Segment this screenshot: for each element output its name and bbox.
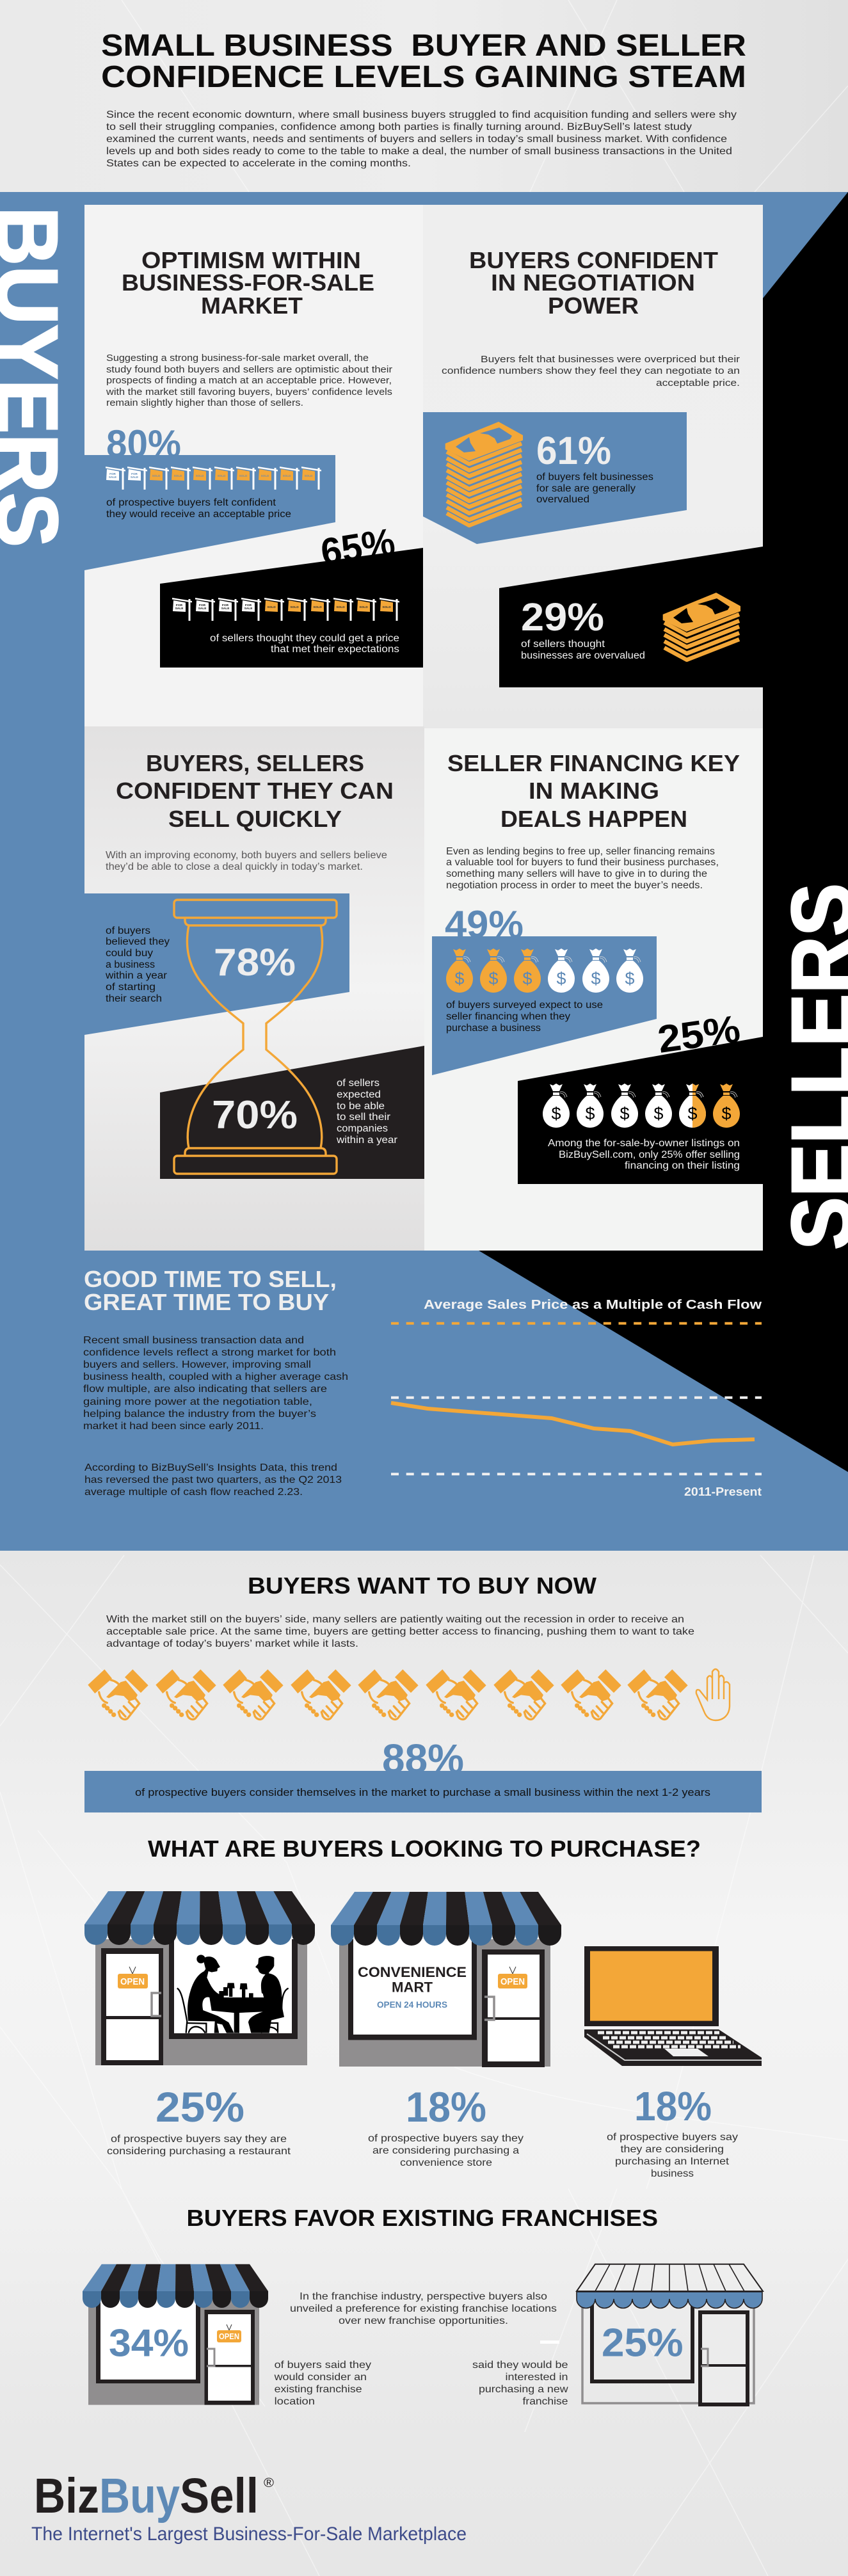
body text: prospects of finding a match at an acceptable price. However, [106,375,392,386]
icon: existing franchise store: OPEN [219,2332,239,2341]
logo: BizBuySell [34,2468,274,2524]
sellers text [336,1078,397,1146]
icon row: sold signs: SALE [175,607,184,611]
middle text: over new franchise opportunities. [339,2316,508,2326]
icon row: sold signs: SALE [221,607,230,611]
icon row: for sale signs [106,467,321,490]
body text: with the market still favoring buyers, buyers’ confidence levels [106,387,392,397]
blue callout [423,412,687,544]
body text: remain slightly higher than those of sellers. [106,397,303,408]
intro text [106,109,737,169]
body text [83,1335,348,1432]
new franchise text: purchasing a new [479,2384,568,2395]
icon row: handshakes [88,1669,688,1720]
black callout [160,548,423,668]
buyers text: of starting [106,982,156,993]
black callout text: BizBuySell.com, only 25% offer selling [559,1149,740,1160]
heading: WHAT ARE BUYERS LOOKING TO PURCHASE? [148,1836,701,1862]
callout text: of prospective buyers felt confident [106,497,276,508]
body text: buyers and sellers. However, improving small [83,1359,311,1370]
icon: money stack [445,422,523,525]
icon row: money bags: $ [522,969,532,988]
icon row: for sale signs: FOR [109,472,116,476]
body text: acceptable price. [656,378,740,388]
stat: internet business: they are considering [621,2144,724,2155]
black callout [518,1037,763,1184]
black callout text: of sellers thought they could get a price [210,633,399,644]
sellers text: to sell their [337,1112,390,1123]
heading: MARKET [201,292,303,319]
icon row: for sale signs: SOLD [218,474,226,477]
body text [106,353,392,408]
icon row: for sale signs: SOLD [283,474,291,477]
heading: SELLER FINANCING KEY [447,750,740,776]
stat: internet business: purchasing an Internet [615,2156,730,2167]
stat: internet business: 18% [634,2083,712,2129]
callout text [446,1000,603,1034]
heading: SELL QUICKLY [168,806,342,832]
black callout text: financing on their listing [625,1160,740,1171]
icon: restaurant storefront [84,1891,315,2065]
icon row: money bags on black: $ [585,1104,595,1123]
icon row: for sale signs: SOLD [305,474,313,477]
body text: market it had been since early 2011. [83,1421,264,1432]
callout text: of buyers surveyed expect to use [446,1000,603,1011]
icon row: sold signs: SOLD [359,605,368,609]
black callout [160,1046,424,1179]
icon row: money bags on black: $ [551,1104,561,1123]
icon row: sold signs: FOR [222,604,229,607]
stat: 25 percent: 25% [655,1007,743,1061]
icon: convenience store [331,1892,561,2067]
icon row: sold signs: SOLD [382,605,391,609]
body text: flow multiple, are also indicating that sellers are [83,1384,327,1395]
section: buyers favor existing franchises [83,2205,763,2407]
stat: 65 percent: 65% [318,520,398,574]
stat: convenience store: are considering purchasing a [372,2145,519,2156]
sellers text: companies [337,1123,388,1134]
icon row: sold signs: SOLD [290,605,299,609]
body text: Suggesting a strong business-for-sale market overall, the [106,353,369,364]
icon row: sold signs: FOR [176,604,183,607]
stat: restaurant: considering purchasing a restaurant [107,2146,291,2157]
icon: raised hand [696,1669,730,1720]
stat: restaurant [107,2083,291,2157]
stat: 78 percent: 78% [214,941,296,984]
body text: gaining more power at the negotiation table, [83,1396,312,1407]
body text: acceptable sale price. At the same time, buyers are getting better access to financing, pushing them to want to take [106,1626,694,1637]
sellers text: expected [337,1089,381,1100]
title: CONFIDENCE LEVELS GAINING STEAM [101,60,746,94]
black callout text [210,633,399,655]
heading: BUYERS WANT TO BUY NOW [248,1572,596,1599]
stat: internet business: of prospective buyers say [607,2132,738,2143]
insights text: has reversed the past two quarters, as the Q2 2013 [84,1475,342,1485]
icon row: for sale signs: SALE [109,476,116,479]
icon row: money bags: $ [556,969,566,988]
insights text: average multiple of cash flow reached 2.23. [84,1487,303,1498]
middle text [290,2291,557,2326]
buyers text: within a year [105,970,167,981]
body text [106,850,387,872]
existing franchise text: of buyers said they [275,2360,371,2371]
intro text: to sell their struggling companies, confidence among both parties is finally turning around. BizBuySell’s latest study [106,122,692,132]
body text: With the market still on the buyers’ side, many sellers are patiently waiting out the recession in order to receive an [106,1614,684,1625]
black callout text: of sellers thought [521,639,605,650]
section: good time to sell [83,1266,762,1498]
callout text: purchase a business [446,1023,541,1034]
icon: convenience store: OPEN 24 HOURS [377,1999,447,2010]
black callout [499,547,763,687]
logo: BizBuySell: ® [264,2476,274,2490]
buyers text [105,925,170,1004]
icon row: sold signs: SOLD [313,605,322,609]
panel: seller financing [432,750,763,1184]
icon row: money bags: $ [488,969,499,988]
middle text: unveiled a preference for existing franchise locations [290,2303,557,2314]
stat: convenience store: of prospective buyers say they [368,2133,524,2144]
heading: GREAT TIME TO BUY [84,1289,329,1315]
heading: BUYERS CONFIDENT [469,247,718,273]
title: SMALL BUSINESS BUYER AND SELLER [101,28,746,63]
stat: restaurant: 25% [156,2083,244,2131]
sellers text: to be able [337,1101,385,1112]
body text: negotiation process in order to meet the buyer’s needs. [446,880,703,891]
title [101,28,746,94]
new franchise text: interested in [506,2372,568,2383]
new franchise text [472,2360,568,2407]
icon row: money bags on black [543,1084,740,1128]
icon: hourglass [174,900,337,1174]
icon row: for sale signs: SOLD [174,474,182,477]
sellers text: of sellers [337,1078,380,1089]
body text: business health, coupled with a higher average cash [83,1372,348,1382]
intro text: States can be expected to accelerate in the coming months. [106,158,411,169]
sellers text: within a year [336,1135,397,1146]
icon: existing franchise store [83,2264,268,2405]
stat: 49 percent: 49% [445,903,524,946]
body text: something many sellers will have to give in to during the [446,868,707,879]
callout text [106,497,291,520]
section: buyers want to buy now [84,1572,762,1812]
blue band [84,1771,762,1812]
body text: With an improving economy, both buyers and sellers believe [106,850,387,861]
callout text: of buyers felt businesses [536,472,653,483]
icon: existing franchise store: 34% [109,2322,189,2365]
stat: convenience store [368,2083,524,2168]
existing franchise text: location [275,2396,315,2407]
panel: optimism [84,247,423,668]
icon row: for sale signs: SOLD [196,474,204,477]
icon row: sold signs: SALE [244,607,253,611]
section: what are buyers looking to purchase [84,1836,762,2179]
icon row: for sale signs: SOLD [239,474,248,477]
stat: 70 percent: 70% [212,1093,298,1137]
body text: advantage of today’s buyers’ market while it lasts. [106,1638,358,1649]
buyers text: their search [106,993,162,1004]
body text: Buyers felt that businesses were overpriced but their [481,354,740,365]
heading: IN NEGOTIATION [491,269,695,296]
heading [116,750,394,832]
new franchise text: said they would be [472,2360,568,2371]
body text: a valuable tool for buyers to fund their business purchases, [446,857,719,868]
intro text: examined the current wants, needs and sentiments of buyers and sellers in today’s small business market. With confidence [106,134,727,145]
icon row: sold signs [172,598,399,621]
existing franchise text [273,2360,371,2407]
logo: BizBuySell: Biz [34,2468,99,2524]
black callout text [548,1138,740,1171]
body text: confidence numbers show they feel they can negotiate to an [442,365,740,376]
heading: CONFIDENT THEY CAN [116,778,394,804]
buyers text: could buy [106,948,153,959]
icon row: money bags on black: $ [653,1104,664,1123]
stat: 61 percent: 61% [536,429,611,472]
blue band: of prospective buyers consider themselves in the market to purchase a small business within the next 1-2 years [135,1787,710,1798]
callout text: seller financing when they [446,1011,570,1022]
blue callout [432,936,657,1075]
heading [447,750,740,832]
black callout text: that met their expectations [271,644,399,655]
stat: 80 percent: 80% [106,422,181,465]
body text: they’d be able to close a deal quickly in today’s market. [106,861,363,872]
panel backgrounds [84,205,763,1251]
stat: convenience store: convenience store [400,2157,492,2168]
icon: convenience store: CONVENIENCE [358,1964,467,1980]
chart title: Average Sales Price as a Multiple of Cash Flow [424,1298,762,1312]
new franchise text: franchise [522,2396,568,2407]
icon row: for sale signs: FOR [131,472,138,476]
icon row: for sale signs: SALE [131,476,138,479]
blue callout [84,893,349,1035]
body text: Even as lending begins to free up, seller financing remains [446,846,715,857]
icon: convenience store: OPEN [500,1976,525,1987]
intro text: levels up and both sides ready to come to the table to make a deal, the number of small business transactions in the United [106,146,732,157]
callout text: overvalued [536,494,589,505]
icon row: for sale signs: SOLD [152,474,161,477]
insights text: According to BizBuySell’s Insights Data, this trend [84,1462,337,1473]
icon row: money bags: $ [454,969,465,988]
icon: restaurant storefront: OPEN [120,1976,145,1987]
heading: BUYERS FAVOR EXISTING FRANCHISES [187,2205,658,2231]
icon row: sold signs: FOR [245,604,252,607]
icon row: money bags: $ [625,969,635,988]
body text: study found both buyers and sellers are optimistic about their [106,364,392,375]
body text [442,354,740,388]
buyers text: of buyers [106,925,150,936]
line chart: cash flow multiple [391,1324,762,1474]
icon row: money bags [446,948,643,993]
heading [469,247,718,319]
heading: BUSINESS-FOR-SALE [122,269,374,296]
heading: POWER [548,292,639,319]
black callout text: businesses are overvalued [521,650,645,661]
insights text [84,1462,342,1498]
body text: Recent small business transaction data and [83,1335,304,1346]
existing franchise text: would consider an [273,2372,367,2383]
chart axis label: 2011-Present [684,1485,762,1498]
heading: OPTIMISM WITHIN [141,247,361,273]
heading: BUYERS, SELLERS [146,750,364,776]
icon: convenience store: MART [392,1979,433,1996]
buyers text: believed they [106,936,170,947]
middle text: In the franchise industry, perspective buyers also [300,2291,547,2302]
blue backdrop panel [0,192,848,1551]
icon row: money bags on black: $ [721,1104,732,1123]
icon: laptop [584,1946,762,2066]
callout text [536,472,653,505]
body text [446,846,719,891]
heading: IN MAKING [529,778,659,804]
stat: convenience store: 18% [406,2083,486,2131]
logo: BizBuySell: Buy [99,2468,180,2524]
heading [122,247,374,319]
blue callout [84,455,335,570]
body text: helping balance the industry from the buyer’s [83,1409,316,1420]
stat: 29 percent: 29% [521,595,604,639]
heading: GOOD TIME TO SELL, [84,1266,337,1292]
heading: DEALS HAPPEN [500,806,687,832]
icon: new franchise store [577,2264,763,2404]
buyers text: a business [106,959,155,970]
icon row: sold signs: FOR [199,604,206,607]
heading [84,1266,337,1315]
black callout text [521,639,645,661]
stat: internet business: business [651,2168,694,2179]
icon: new franchise store: 25% [602,2321,684,2365]
icon row: money bags on black: $ [687,1104,698,1123]
tagline: The Internet's Largest Business-For-Sale Marketplace [31,2524,467,2545]
stat: internet business [607,2083,738,2179]
icon row: money bags on black: $ [620,1104,630,1123]
icon row: for sale signs: SOLD [261,474,269,477]
icon row: sold signs: SALE [198,607,207,611]
icon row: sold signs: SOLD [267,605,276,609]
black diagonal backdrop [479,192,848,1472]
black callout text: Among the for-sale-by-owner listings on [548,1138,740,1149]
icon row: money bags: $ [591,969,601,988]
body text: confidence levels reflect a strong market for both [83,1347,336,1358]
callout text: they would receive an acceptable price [106,509,291,520]
stat: 88 percent: 88% [382,1736,464,1782]
existing franchise text: existing franchise [275,2384,362,2395]
callout text: for sale are generally [536,483,636,494]
icon: small money stack [663,593,740,660]
body text [106,1614,694,1649]
stat: restaurant: of prospective buyers say they are [111,2134,287,2145]
panel: negotiation power [423,247,763,687]
logo: BizBuySell: Sell [180,2468,259,2524]
icon row: sold signs: SOLD [336,605,345,609]
intro text: Since the recent economic downturn, where small business buyers struggled to find acquisition funding and sellers were shy [106,109,737,120]
panel: sell quickly [84,750,424,1179]
